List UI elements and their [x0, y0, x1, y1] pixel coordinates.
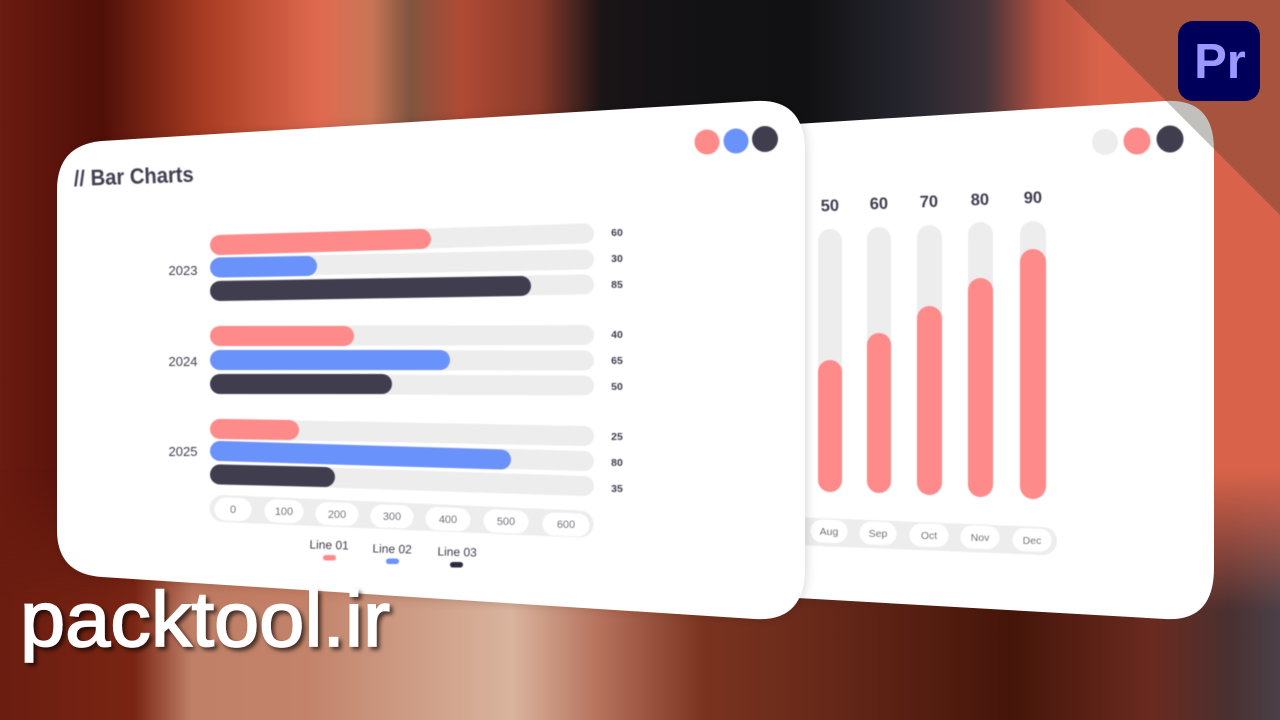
series 1 bars: pink: [220, 239, 421, 430]
icon: Premiere Pro badge: [1178, 21, 1260, 101]
value labels above vertical bars: 80: [970, 191, 989, 209]
value labels above vertical bars: 60: [869, 195, 888, 213]
value axis: 500: [497, 516, 515, 528]
bar value labels: 30: [611, 253, 623, 265]
heading: // Bar Charts: [73, 162, 194, 191]
icon: Premiere Pro badge: Pr: [1194, 35, 1246, 89]
bar value labels: 35: [611, 483, 623, 495]
month axis: Aug: [820, 526, 838, 538]
bar value labels: 80: [611, 457, 623, 469]
bar value labels: 50: [611, 381, 623, 393]
legend dots: right card: [1092, 126, 1184, 155]
chart legend: Line 03: [437, 544, 477, 560]
bar value labels: 25: [611, 431, 623, 443]
legend dots: left card: [694, 126, 778, 154]
bar value labels: 85: [611, 279, 623, 291]
value axis: 300: [383, 511, 401, 523]
month axis: Dec: [1023, 535, 1041, 547]
value labels above vertical bars: 70: [919, 193, 938, 211]
year labels: 2024: [169, 354, 197, 369]
value axis: [223, 504, 580, 531]
chart legend: Line 02: [372, 541, 412, 557]
series 3 bars: dark: [220, 286, 521, 477]
bar value labels: 65: [611, 355, 623, 367]
panel: right card, vertical bar chart: [780, 101, 1214, 619]
value labels above vertical bars: 50: [820, 197, 839, 215]
vertical bar fills: [818, 249, 1046, 499]
bar value labels: 60: [611, 227, 623, 239]
value axis: 200: [328, 509, 346, 521]
value labels above vertical bars: 90: [1023, 189, 1042, 207]
year labels: [169, 263, 197, 459]
month axis: [806, 526, 1043, 547]
value axis: 400: [439, 514, 457, 526]
vertical bar tracks: [818, 221, 1046, 499]
year labels: 2025: [169, 444, 197, 459]
month axis: Oct: [921, 530, 937, 542]
value axis: 600: [557, 519, 575, 531]
month axis: Nov: [971, 532, 990, 544]
value axis: 100: [275, 506, 293, 518]
year labels: 2023: [169, 263, 197, 278]
month axis: Sep: [869, 528, 887, 540]
chart legend: [309, 537, 477, 568]
watermark: packtool.ir: [20, 575, 390, 663]
horizontal bar tracks: [221, 234, 584, 486]
value labels above vertical bars: [820, 189, 1042, 215]
chart legend: Line 01: [309, 537, 349, 553]
series 2 bars: blue: [220, 266, 501, 460]
panel: left card, horizontal bar charts: [57, 101, 805, 619]
bar value labels: 40: [611, 329, 623, 341]
value axis: 0: [230, 504, 236, 516]
bar value labels: [611, 227, 623, 495]
diagonal corner overlay: [1065, 0, 1280, 215]
